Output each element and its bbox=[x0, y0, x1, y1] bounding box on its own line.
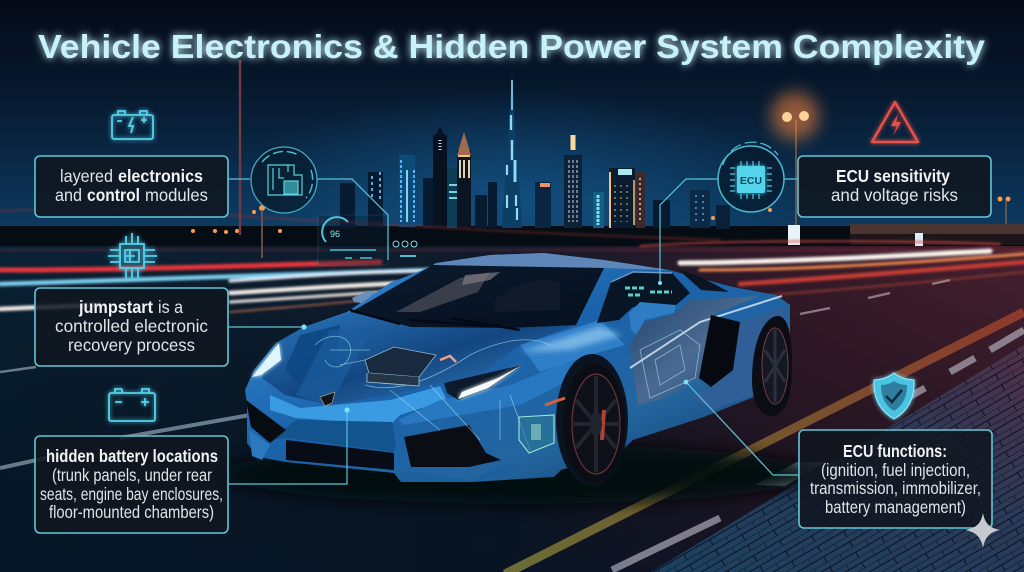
panel: jumpstart: controlled electronic bbox=[55, 316, 208, 336]
front lower air intakes bbox=[404, 425, 501, 467]
panel: layered electronics: layered bbox=[60, 166, 113, 186]
background: city glow bbox=[210, 90, 810, 310]
connector: ECU functions to door bbox=[686, 382, 799, 475]
mirrors bbox=[629, 302, 676, 340]
panel: hidden battery locations: seats, engine bay enclosures, bbox=[40, 484, 223, 504]
bonnet badge bbox=[320, 392, 335, 406]
icon: circuit board ring bbox=[251, 147, 317, 213]
background: night sky bbox=[0, 0, 1024, 245]
panel: layered electronics: modules bbox=[145, 185, 208, 205]
connector: ECU sensitivity to cabin bbox=[660, 179, 798, 283]
Burj tower bbox=[502, 72, 522, 228]
connector: electronics to dashboard bbox=[228, 179, 388, 260]
HUD overlay near dashboard: 96 bbox=[330, 229, 340, 239]
connector dots bbox=[301, 281, 688, 413]
front nose panel bbox=[270, 386, 447, 425]
light trails bbox=[0, 210, 1024, 312]
wheel arch and front wheel bbox=[556, 354, 628, 486]
icon: chip processor bbox=[108, 233, 157, 279]
icon: shield check bbox=[874, 373, 914, 419]
panel: ECU functions: ECU functions: bbox=[843, 441, 947, 461]
door panel bbox=[630, 296, 760, 405]
icon: ECU chip ring: ECU bbox=[740, 175, 762, 187]
connector: jumpstart to hood bbox=[228, 326, 304, 328]
car body bbox=[245, 253, 790, 482]
panel: jumpstart: is a bbox=[158, 297, 183, 317]
transparent engine wiring bbox=[315, 330, 700, 450]
panel: layered electronics bbox=[35, 156, 228, 217]
icon: sparkle bbox=[965, 513, 1000, 548]
panel: ECU sensitivity bbox=[798, 156, 991, 217]
side window with display bbox=[597, 272, 690, 323]
engine control unit module bbox=[365, 347, 456, 386]
horizon lights and bridge bbox=[191, 60, 1024, 258]
city skyline bbox=[0, 72, 1024, 246]
HUD overlay near dashboard bbox=[318, 215, 417, 265]
panel: hidden battery locations: (trunk panels, under rear bbox=[52, 465, 212, 485]
hidden battery module bbox=[519, 415, 554, 453]
panel: ECU functions: battery management) bbox=[825, 497, 966, 517]
roof highlight bbox=[433, 253, 669, 270]
background: road bbox=[0, 245, 1024, 572]
windshield bbox=[351, 265, 604, 328]
panel: ECU functions bbox=[799, 430, 992, 528]
street lamp glow bbox=[771, 92, 819, 140]
hood panel bbox=[262, 312, 576, 405]
rear wheel bbox=[752, 316, 792, 416]
panel: hidden battery locations bbox=[35, 436, 228, 533]
panel: ECU functions: transmission, immobilizer, bbox=[810, 478, 981, 498]
panel: jumpstart: recovery process bbox=[68, 335, 195, 355]
panel: hidden battery locations: floor-mounted chambers) bbox=[49, 502, 214, 522]
panel: jumpstart bbox=[35, 288, 228, 366]
panel: layered electronics: electronics bbox=[118, 166, 203, 186]
panel: hidden battery locations: hidden battery locations bbox=[46, 446, 218, 466]
icon: battery with bolt bbox=[112, 111, 153, 139]
headlights bbox=[444, 365, 522, 400]
sports car with transparent electronics bbox=[245, 253, 792, 486]
panel: ECU sensitivity: and voltage risks bbox=[831, 185, 958, 205]
panel: ECU functions: (ignition, fuel injection, bbox=[821, 460, 970, 480]
icon: battery bbox=[109, 389, 155, 421]
connector: battery to bumper bbox=[228, 410, 347, 484]
panel: layered electronics: and bbox=[55, 185, 82, 205]
panel: jumpstart: jumpstart bbox=[78, 297, 153, 317]
title: Vehicle Electronics & Hidden Power System Complexity bbox=[38, 28, 986, 65]
road markings and curb bbox=[0, 280, 1024, 572]
icon: red voltage warning triangle bbox=[872, 102, 918, 142]
panel: layered electronics: control bbox=[87, 185, 140, 205]
car shadow bbox=[220, 444, 820, 504]
side air intake bbox=[699, 315, 740, 387]
panel: ECU sensitivity: ECU sensitivity bbox=[836, 166, 950, 186]
icon: ECU chip ring bbox=[718, 142, 784, 212]
